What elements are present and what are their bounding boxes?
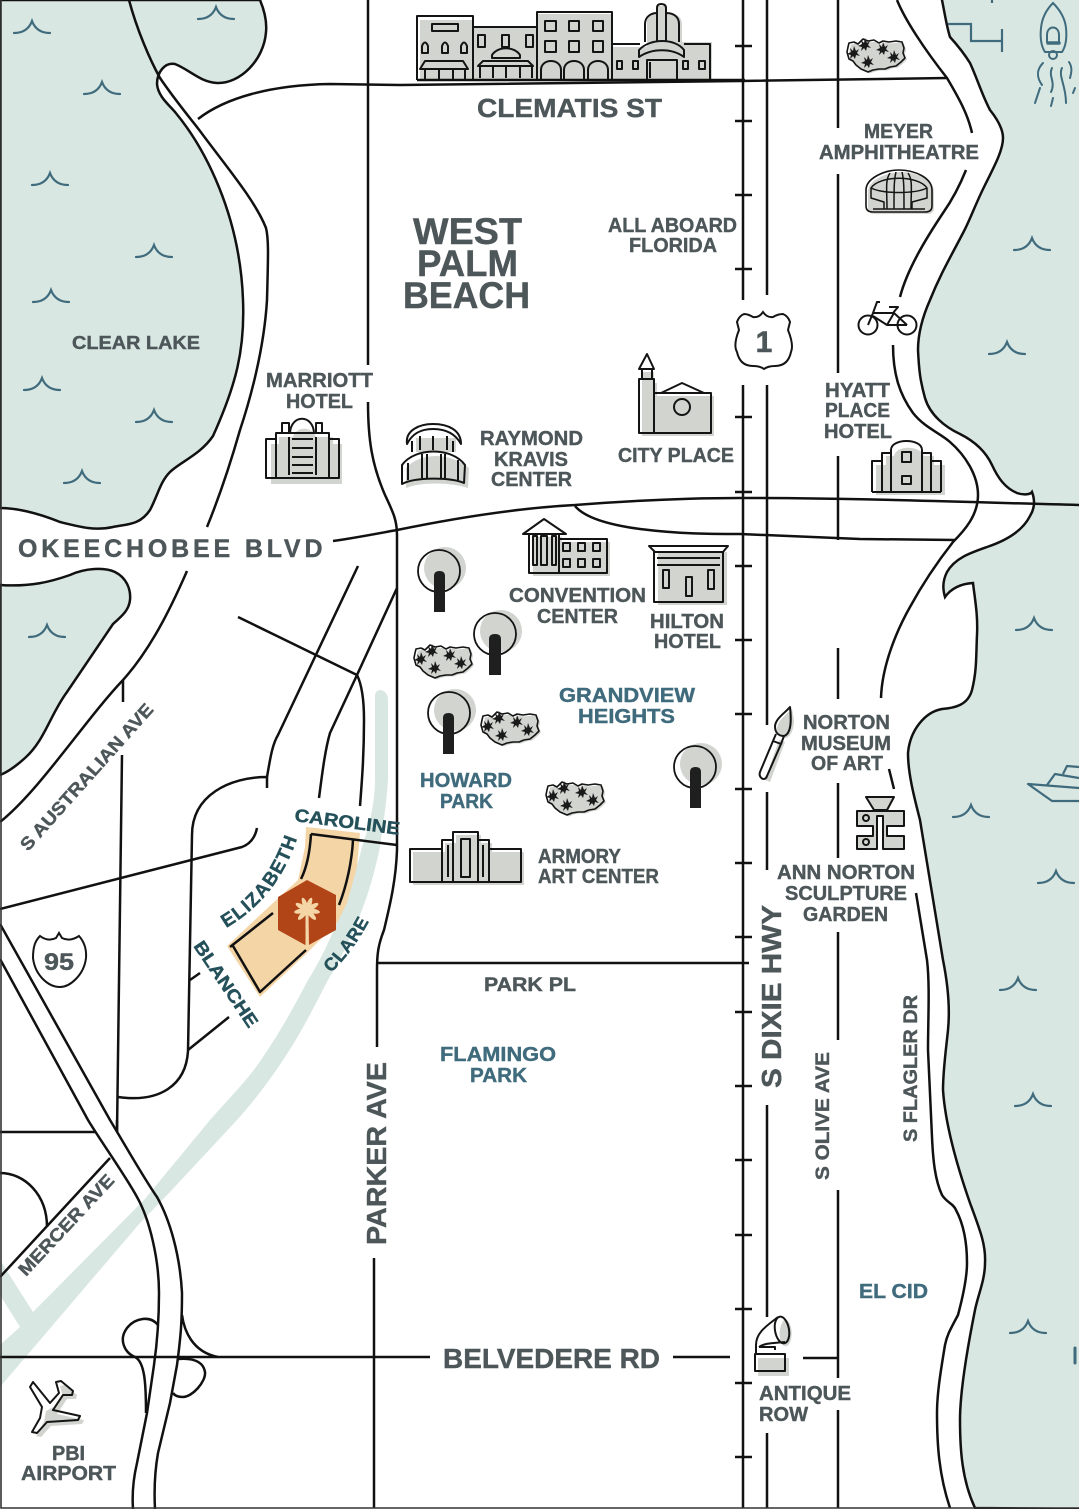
label: el cid: EL CID [859, 1281, 928, 1303]
icon: convention center [523, 519, 610, 576]
road label: s olive ave: S OLIVE AVE [813, 1052, 834, 1180]
label: pbi airport: PBI [52, 1443, 85, 1465]
icon: bush 3 [546, 781, 606, 816]
label: grandview heights: HEIGHTS [578, 706, 675, 728]
heading: west palm beach: BEACH [403, 275, 530, 316]
heading: west palm beach: WEST [413, 211, 522, 252]
label: city place: CITY PLACE [618, 445, 734, 467]
label: raymond kravis center: RAYMOND [480, 428, 583, 450]
street label: elizabeth: ELIZABETH [220, 835, 297, 928]
label: norton museum of art: OF ART [811, 753, 883, 775]
label: raymond kravis center: CENTER [491, 469, 573, 491]
label: raymond kravis center: KRAVIS [494, 449, 568, 471]
label: ann norton sculpture garden: ANN NORTON [777, 862, 915, 884]
pier [948, 0, 1002, 52]
icon: armory art center [410, 832, 524, 885]
icon: bicycle [858, 302, 916, 334]
label: grandview heights: GRANDVIEW [559, 685, 695, 707]
label: convention center [509, 585, 646, 628]
road label: park pl: PARK PL [484, 975, 576, 996]
label: meyer amphitheatre: MEYER [864, 121, 934, 143]
label: norton museum of art [801, 712, 891, 775]
label: convention center: CENTER [537, 606, 619, 628]
icon: airplane [30, 1381, 84, 1437]
icon: marriott hotel [266, 419, 342, 484]
label: flamingo park: FLAMINGO [440, 1044, 556, 1066]
icon: tree 4 [674, 743, 722, 808]
label: ann norton sculpture garden: GARDEN [803, 904, 888, 926]
icon: I-95 shield: 95 [44, 949, 74, 976]
label: pbi airport: AIRPORT [21, 1463, 116, 1485]
street label: blanche: BLANCHE [190, 937, 262, 1031]
icon: paintbrush [760, 707, 794, 782]
label: hilton hotel: HOTEL [654, 631, 721, 653]
label: norton museum of art: NORTON [803, 712, 890, 734]
label: flamingo park [440, 1044, 556, 1087]
label: armory art center [538, 846, 660, 888]
icon: tree 2 [474, 610, 522, 675]
icon: amphitheatre [866, 170, 934, 214]
label: marriott hotel [266, 370, 373, 413]
label: armory art center: ART CENTER [538, 866, 660, 888]
road label: clematis st: CLEMATIS ST [477, 93, 662, 123]
icon: tree 1 [418, 547, 466, 612]
property parcel [227, 827, 360, 997]
icon: bush 1 [414, 644, 474, 680]
road label: s dixie hwy: S DIXIE HWY [756, 905, 787, 1088]
label: all aboard florida: FLORIDA [629, 235, 717, 257]
label: norton museum of art: MUSEUM [801, 733, 891, 755]
label: antique row [759, 1383, 851, 1426]
water: south lake [0, 569, 130, 775]
icon: US 1 shield: 1 [756, 326, 772, 359]
icon: city place [639, 354, 714, 436]
label: howard park: PARK [440, 791, 494, 813]
label: hyatt place hotel: PLACE [825, 400, 890, 422]
label: ann norton sculpture garden [777, 862, 915, 926]
label: meyer amphitheatre: AMPHITHEATRE [819, 142, 979, 164]
heading: west palm beach: PALM [417, 243, 518, 284]
street label: clare: CLARE [324, 916, 369, 971]
label: hilton hotel: HILTON [650, 611, 724, 633]
icon: clematis street buildings [417, 4, 712, 80]
label: all aboard florida: ALL ABOARD [608, 215, 737, 237]
label: hyatt place hotel [824, 380, 892, 443]
road label: mercer ave: MERCER AVE [14, 1170, 118, 1280]
label: grandview heights [559, 685, 695, 728]
label: ann norton sculpture garden: SCULPTURE [785, 883, 907, 905]
label: hyatt place hotel: HYATT [825, 380, 890, 402]
label: marriott hotel: HOTEL [286, 391, 353, 413]
label: flamingo park: PARK [470, 1065, 528, 1087]
icon: I-95 shield [33, 933, 86, 987]
road label: belvedere rd: BELVEDERE RD [443, 1343, 660, 1374]
road label: okeechobee blvd: OKEECHOBEE BLVD [18, 535, 324, 563]
label: hilton hotel [650, 611, 724, 653]
heading: west palm beach [403, 211, 530, 316]
icon: tree 3 [428, 689, 476, 754]
icon: yacht [1028, 766, 1079, 801]
icon: boat with wake [1035, 3, 1075, 106]
icon: gramophone [755, 1315, 792, 1376]
icon: raymond kravis center [402, 424, 469, 488]
road label: parker ave: PARKER AVE [361, 1062, 392, 1245]
label: howard park [420, 770, 512, 813]
label: clear lake: CLEAR LAKE [72, 333, 200, 353]
label: meyer amphitheatre [819, 121, 979, 164]
icon: bush 2 [481, 711, 541, 746]
icon: property hexagon with palm [278, 880, 336, 946]
label: raymond kravis center [480, 428, 583, 491]
icon: sculpture garden [857, 797, 905, 849]
icon: hyatt place hotel [872, 441, 945, 495]
street label: caroline: CAROLINE [293, 805, 401, 839]
label: armory art center: ARMORY [538, 846, 622, 868]
icon: US 1 shield [735, 312, 792, 369]
label: antique row: ANTIQUE [759, 1383, 851, 1405]
label: all aboard florida [608, 215, 737, 257]
label: antique row: ROW [759, 1404, 808, 1426]
water: clear lake [0, 0, 266, 529]
water: intracoastal waterway [908, 0, 1079, 1509]
road label: s flagler dr: S FLAGLER DR [901, 995, 922, 1142]
rail corridor [0, 690, 388, 1387]
road label: s australian ave: S AUSTRALIAN AVE [16, 699, 157, 855]
icon: hilton hotel [649, 546, 728, 605]
label: marriott hotel: MARRIOTT [266, 370, 373, 392]
label: hyatt place hotel: HOTEL [824, 421, 892, 443]
label: convention center: CONVENTION [509, 585, 646, 607]
icon: bush north [847, 38, 907, 74]
label: pbi airport [21, 1443, 116, 1485]
label: howard park: HOWARD [420, 770, 512, 792]
